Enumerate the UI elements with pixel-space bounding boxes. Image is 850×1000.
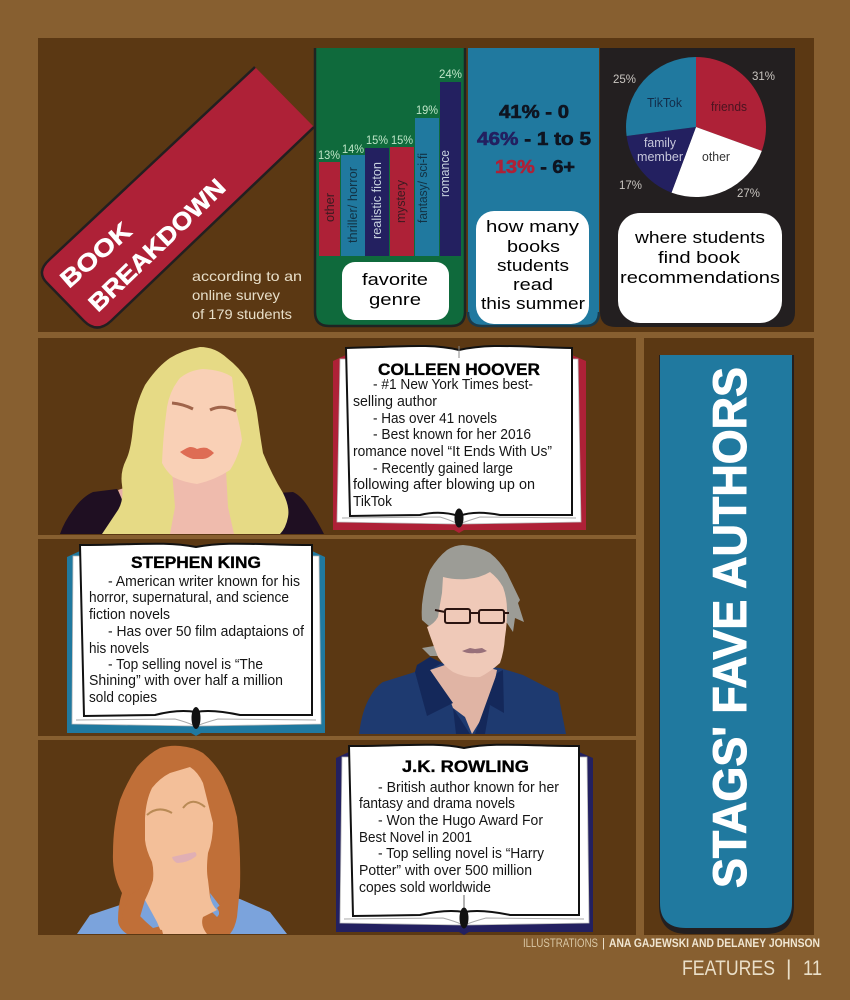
pie chart: recommendations: family — [644, 136, 677, 150]
panel: Colleen Hoover book — [333, 346, 586, 533]
panel: Colleen Hoover book: - Has over 41 novels — [373, 411, 497, 427]
pie chart: recommendations: 25% — [613, 72, 636, 86]
pie chart: recommendations: friends — [711, 100, 747, 114]
pie chart: recommendations: 27% — [737, 186, 760, 200]
panel: Stephen King book: his novels — [89, 641, 149, 657]
panel: J.K. Rowling book: fantasy and drama novels — [359, 796, 515, 812]
bar chart: favorite genre: mystery — [393, 180, 408, 223]
label: how many books — [476, 211, 589, 324]
panel: Stephen King shelf — [38, 539, 636, 736]
text: survey note: online survey — [192, 287, 280, 303]
panel: Stephen King book: STEPHEN KING — [131, 553, 261, 572]
panel: Stags' fave authors bookmark — [659, 355, 794, 934]
panel: Colleen Hoover book: TikTok — [353, 494, 393, 510]
panel: J.K. Rowling book: - British author known for her — [378, 780, 559, 796]
panel: favorite genre book — [315, 48, 465, 326]
label: where students find book recommendations: where students — [634, 228, 765, 247]
panel: Stags' fave authors bookmark: STAGS' FAVE AUTHORS — [703, 367, 756, 888]
pie chart: recommendations: TikTok — [647, 96, 683, 110]
panel: J.K. Rowling book: copes sold worldwide — [359, 880, 491, 896]
panel: Colleen Hoover shelf — [38, 338, 636, 535]
bar chart: favorite genre: realistic ficton — [369, 162, 384, 239]
text: page footer: FEATURES — [682, 957, 775, 980]
pie chart: recommendations: other — [702, 150, 730, 164]
stats: books read — [477, 102, 591, 177]
text: survey note — [192, 268, 302, 322]
bar chart: favorite genre: romance — [437, 150, 452, 197]
text: illustration credit: ANA GAJEWSKI AND DELANEY JOHNSON — [609, 938, 820, 950]
label: how many books: books — [507, 237, 560, 256]
stats: books read: 46% - 1 to 5 — [477, 129, 591, 149]
panel: Stephen King book: - Top selling novel is “The — [108, 657, 263, 673]
panel: Stephen King book: - Has over 50 film adaptaions of — [108, 624, 305, 640]
text: illustration credit: | — [602, 938, 605, 950]
illustration: Stephen King portrait — [359, 545, 566, 734]
text: page footer: 11 — [803, 957, 822, 980]
panel: books read book — [468, 48, 599, 326]
bar chart: favorite genre: thriller/ horror — [345, 166, 360, 243]
pie chart: recommendations — [613, 57, 775, 200]
stats: books read: 13% - 6+ — [495, 157, 575, 177]
panel: Colleen Hoover book: COLLEEN HOOVER — [378, 360, 540, 379]
bar chart: favorite genre: 24% — [439, 67, 462, 81]
bar chart: favorite genre: 15% — [391, 133, 413, 147]
text: survey note: according to an — [192, 268, 302, 284]
text: illustration credit — [523, 938, 820, 950]
panel: top shelf — [38, 38, 814, 332]
label: how many books: read — [513, 275, 553, 294]
label: favorite genre: genre — [369, 290, 421, 309]
bar chart: favorite genre — [318, 67, 462, 256]
text: illustration credit: ILLUSTRATIONS — [523, 938, 598, 950]
bar chart: favorite genre: 13% — [318, 148, 340, 162]
illustration: Colleen Hoover portrait — [60, 347, 324, 534]
panel: J.K. Rowling book: J.K. ROWLING — [402, 757, 529, 776]
bar chart: favorite genre: other — [322, 192, 337, 222]
panel: J.K. Rowling book — [336, 745, 593, 935]
label: where students find book recommendations: recommendations — [620, 268, 780, 287]
panel: Stephen King book: horror, supernatural, and science — [89, 590, 289, 606]
pie chart: recommendations: member — [637, 150, 683, 164]
panel: J.K. Rowling book: Potter” with over 500 million — [359, 863, 532, 879]
panel: Colleen Hoover book: romance novel “It Ends With Us” — [353, 444, 552, 460]
panel: J.K. Rowling book: - Top selling novel is “Harry — [378, 846, 545, 862]
label: how many books: students — [497, 256, 569, 275]
panel: Colleen Hoover book: selling author — [353, 394, 437, 410]
label: how many books: how many — [486, 217, 580, 236]
bar chart: favorite genre: 15% — [366, 133, 388, 147]
pie chart: recommendations: 17% — [619, 178, 642, 192]
text: page footer: | — [786, 957, 791, 980]
panel: Colleen Hoover book: following after blowing up on — [353, 477, 535, 493]
label: favorite genre — [342, 262, 449, 320]
panel: J.K. Rowling shelf — [38, 740, 636, 935]
pie chart: recommendations: 31% — [752, 69, 775, 83]
heading: book breakdown banner: BREAKDOWN — [83, 174, 231, 317]
panel: Stephen King book — [67, 544, 325, 736]
panel: Stephen King book: sold copies — [89, 690, 157, 706]
panel: recommendations book — [600, 48, 795, 327]
panel: Stephen King book: Shining” with over half a million — [89, 673, 283, 689]
illustration: J.K. Rowling portrait — [77, 746, 287, 934]
panel: Stephen King book: - American writer known for his — [108, 574, 300, 590]
bar chart: favorite genre: 14% — [342, 142, 364, 156]
label: how many books: this summer — [481, 294, 585, 313]
panel: Colleen Hoover book: - Best known for her 2016 — [373, 427, 531, 443]
bar chart: favorite genre: fantasy/ sci-fi — [415, 153, 430, 223]
panel: right shelf — [644, 338, 814, 935]
panel: Stephen King book: fiction novels — [89, 607, 170, 623]
label: where students find book recommendations: find book — [658, 248, 741, 267]
label: favorite genre: favorite — [362, 270, 428, 289]
heading: book breakdown banner: BOOK — [55, 217, 138, 294]
bar chart: favorite genre: 19% — [416, 103, 438, 117]
stats: books read: 41% - 0 — [499, 102, 569, 122]
heading: book breakdown banner — [42, 67, 314, 328]
panel: J.K. Rowling book: Best Novel in 2001 — [359, 830, 472, 846]
label: where students find book recommendations — [618, 213, 782, 323]
panel: J.K. Rowling book: - Won the Hugo Award For — [378, 813, 543, 829]
text: survey note: of 179 students — [192, 306, 292, 322]
panel: Colleen Hoover book: - Recently gained large — [373, 461, 513, 477]
panel: Colleen Hoover book: - #1 New York Times best- — [373, 377, 533, 393]
